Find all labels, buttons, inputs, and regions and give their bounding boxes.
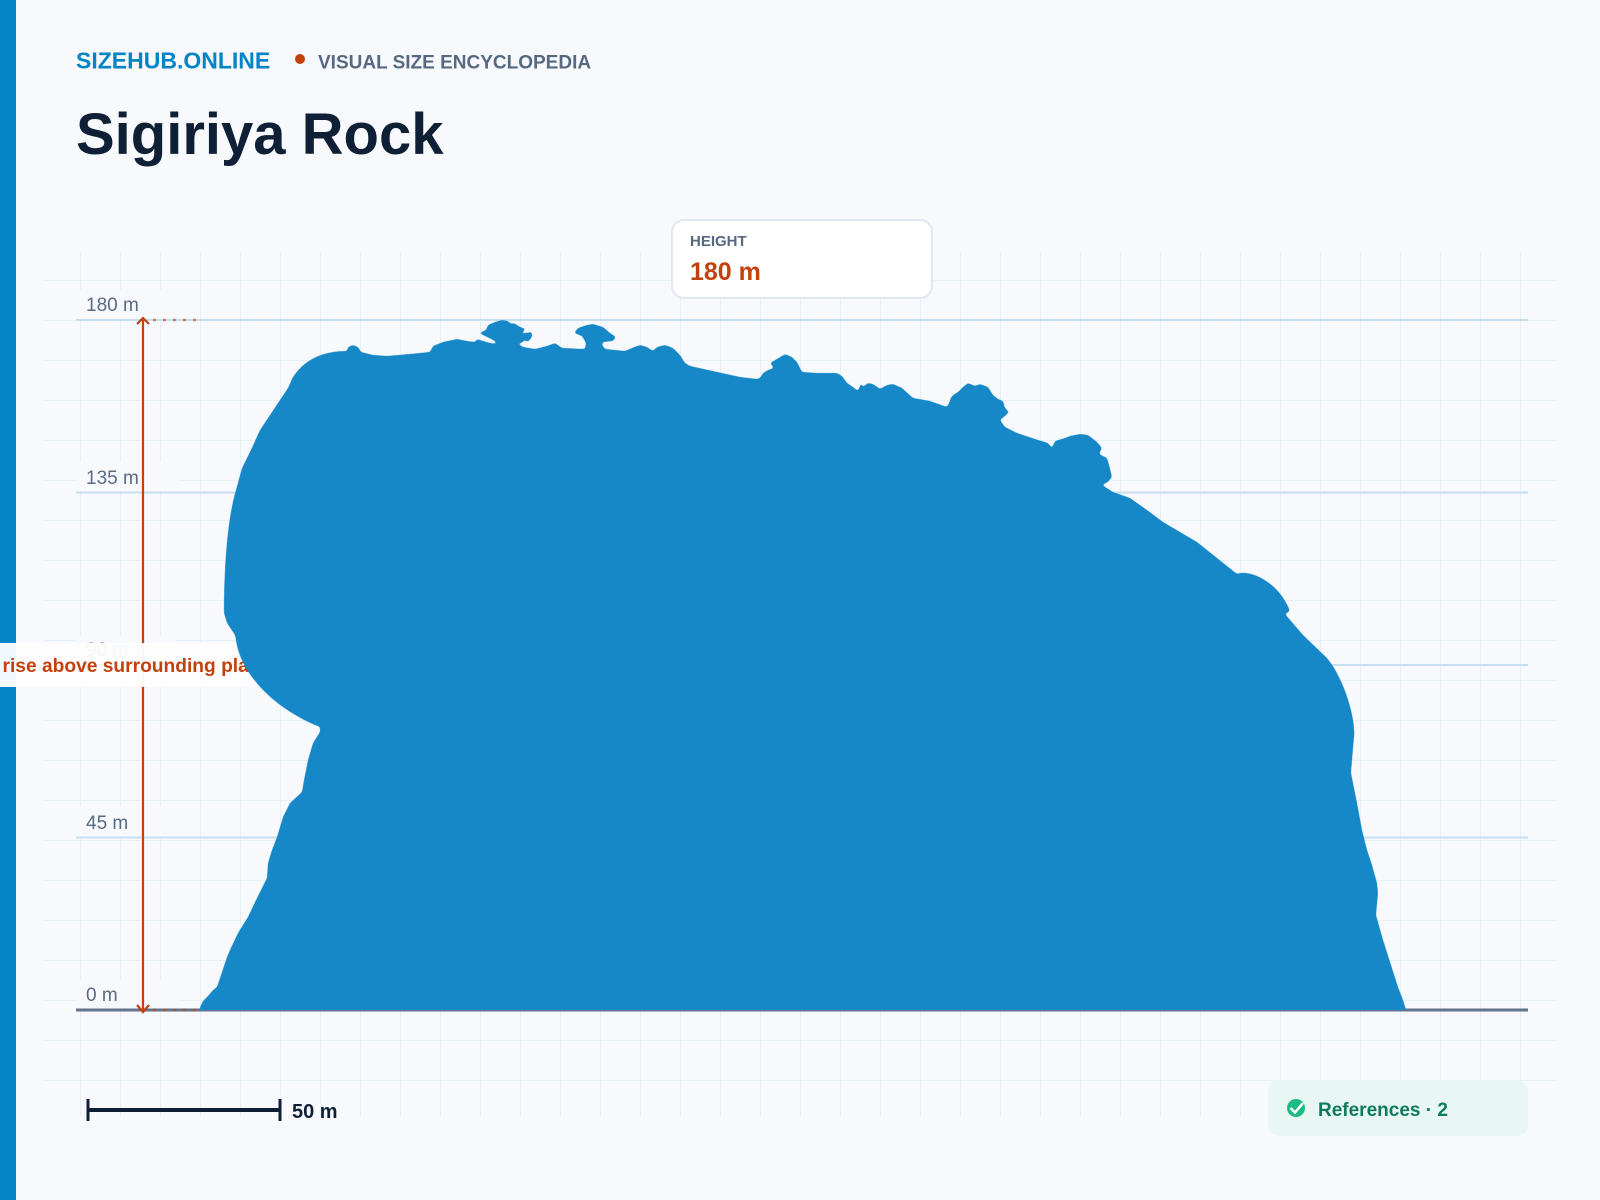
background grid — [44, 252, 1556, 1116]
height value card — [672, 220, 932, 298]
callout label: rise above surrounding plain — [2, 656, 266, 677]
height axis labels and reference lines: 135 m — [86, 468, 139, 489]
scale bar: 50 m — [292, 1101, 338, 1123]
left accent stripe — [0, 0, 16, 1200]
header brand line: VISUAL SIZE ENCYCLOPEDIA — [318, 52, 591, 74]
references badge — [1268, 1080, 1528, 1136]
title: Sigiriya Rock — [76, 102, 444, 167]
height value card: HEIGHT — [690, 233, 747, 250]
scale bar — [88, 1099, 338, 1123]
rock silhouette — [200, 320, 1410, 1030]
header brand line: SIZEHUB.ONLINE — [76, 48, 270, 74]
height axis labels and reference lines — [76, 290, 1528, 1010]
callout label — [0, 643, 280, 687]
height axis labels and reference lines: 0 m — [86, 985, 118, 1006]
height axis labels and reference lines: 45 m — [86, 813, 128, 834]
references badge: References · 2 — [1318, 1100, 1448, 1121]
height axis labels and reference lines: 180 m — [86, 295, 139, 316]
height axis labels and reference lines: 90 m — [86, 640, 128, 661]
height value card: 180 m — [690, 258, 761, 286]
height measure arrow — [137, 318, 200, 1012]
header brand line — [76, 48, 591, 74]
